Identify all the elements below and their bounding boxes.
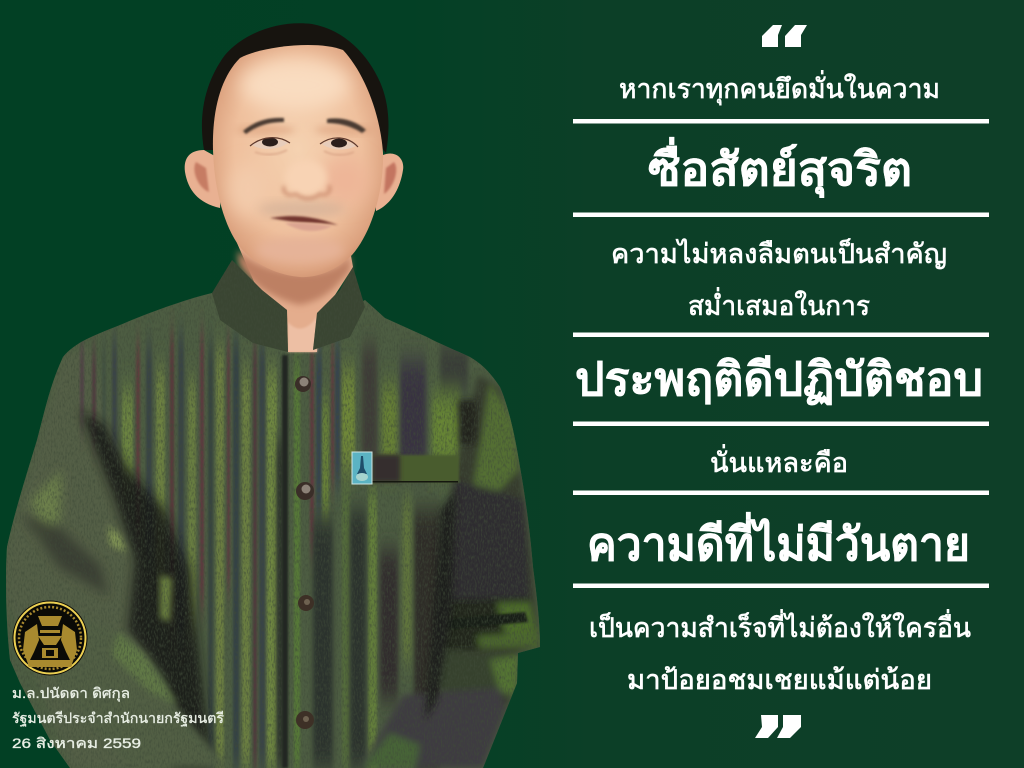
right sleeve bbox=[360, 375, 540, 768]
text: line 3: ความไม่หลงลืมตนเป็นสำคัญ bbox=[611, 236, 947, 269]
icon: opening quotation mark bbox=[762, 25, 807, 47]
noise texture bbox=[0, 280, 560, 768]
ears bbox=[185, 150, 222, 208]
text: line 1: หากเราทุกคนยึดมั่นในความ bbox=[619, 70, 940, 106]
divider 4 bbox=[573, 422, 989, 426]
eyes bbox=[250, 138, 358, 155]
text: honesty: ซื่อสัตย์สุจริต bbox=[648, 137, 912, 198]
divider 1 bbox=[573, 119, 989, 124]
neck bbox=[237, 243, 353, 352]
divider 5 bbox=[573, 490, 989, 495]
hair bbox=[202, 23, 388, 153]
divider 2 bbox=[573, 212, 989, 217]
brows bbox=[243, 118, 284, 134]
left sleeve tone bbox=[6, 358, 62, 601]
shading: left armpit fold bbox=[80, 410, 212, 768]
text: good conduct: ประพฤติดีปฏิบัติชอบ bbox=[575, 353, 983, 405]
text: line 9: มาป้อยอชมเชยแม้แต่น้อย bbox=[627, 665, 932, 695]
torso stripes bbox=[80, 335, 377, 768]
caption: date: 26 สิงหาคม 2559 bbox=[12, 735, 141, 751]
caption bbox=[12, 685, 224, 751]
left sleeve detail bbox=[28, 473, 64, 528]
text: line 8: เป็นความสำเร็จที่ไม่ต้องให้ใครอื่น bbox=[589, 609, 971, 643]
placket shadow bbox=[282, 355, 288, 768]
pin badge bbox=[352, 452, 372, 484]
seal: government emblem bbox=[12, 600, 88, 676]
text: line 4: สม่ำเสมอในการ bbox=[688, 287, 870, 321]
quote panel bbox=[573, 25, 989, 738]
divider 3 bbox=[573, 332, 989, 337]
caption: name: ม.ล.ปนัดดา ดิศกุล bbox=[12, 685, 130, 702]
mouth bbox=[270, 216, 338, 231]
buttons bbox=[295, 376, 314, 729]
collar bbox=[212, 260, 365, 352]
text: undying virtue: ความดีที่ไม่มีวันตาย bbox=[587, 512, 970, 570]
jacket body bbox=[0, 280, 560, 768]
caption: title: รัฐมนตรีประจำสำนักนายกรัฐมนตรี bbox=[12, 710, 224, 727]
pocket bbox=[372, 455, 459, 482]
overall jacket darkening bbox=[0, 280, 560, 768]
divider 6 bbox=[573, 584, 989, 588]
nose bbox=[284, 160, 330, 198]
face bbox=[213, 45, 383, 277]
text: line 6: นั่นแหละคือ bbox=[710, 444, 848, 478]
icon: closing quotation mark bbox=[755, 715, 801, 738]
